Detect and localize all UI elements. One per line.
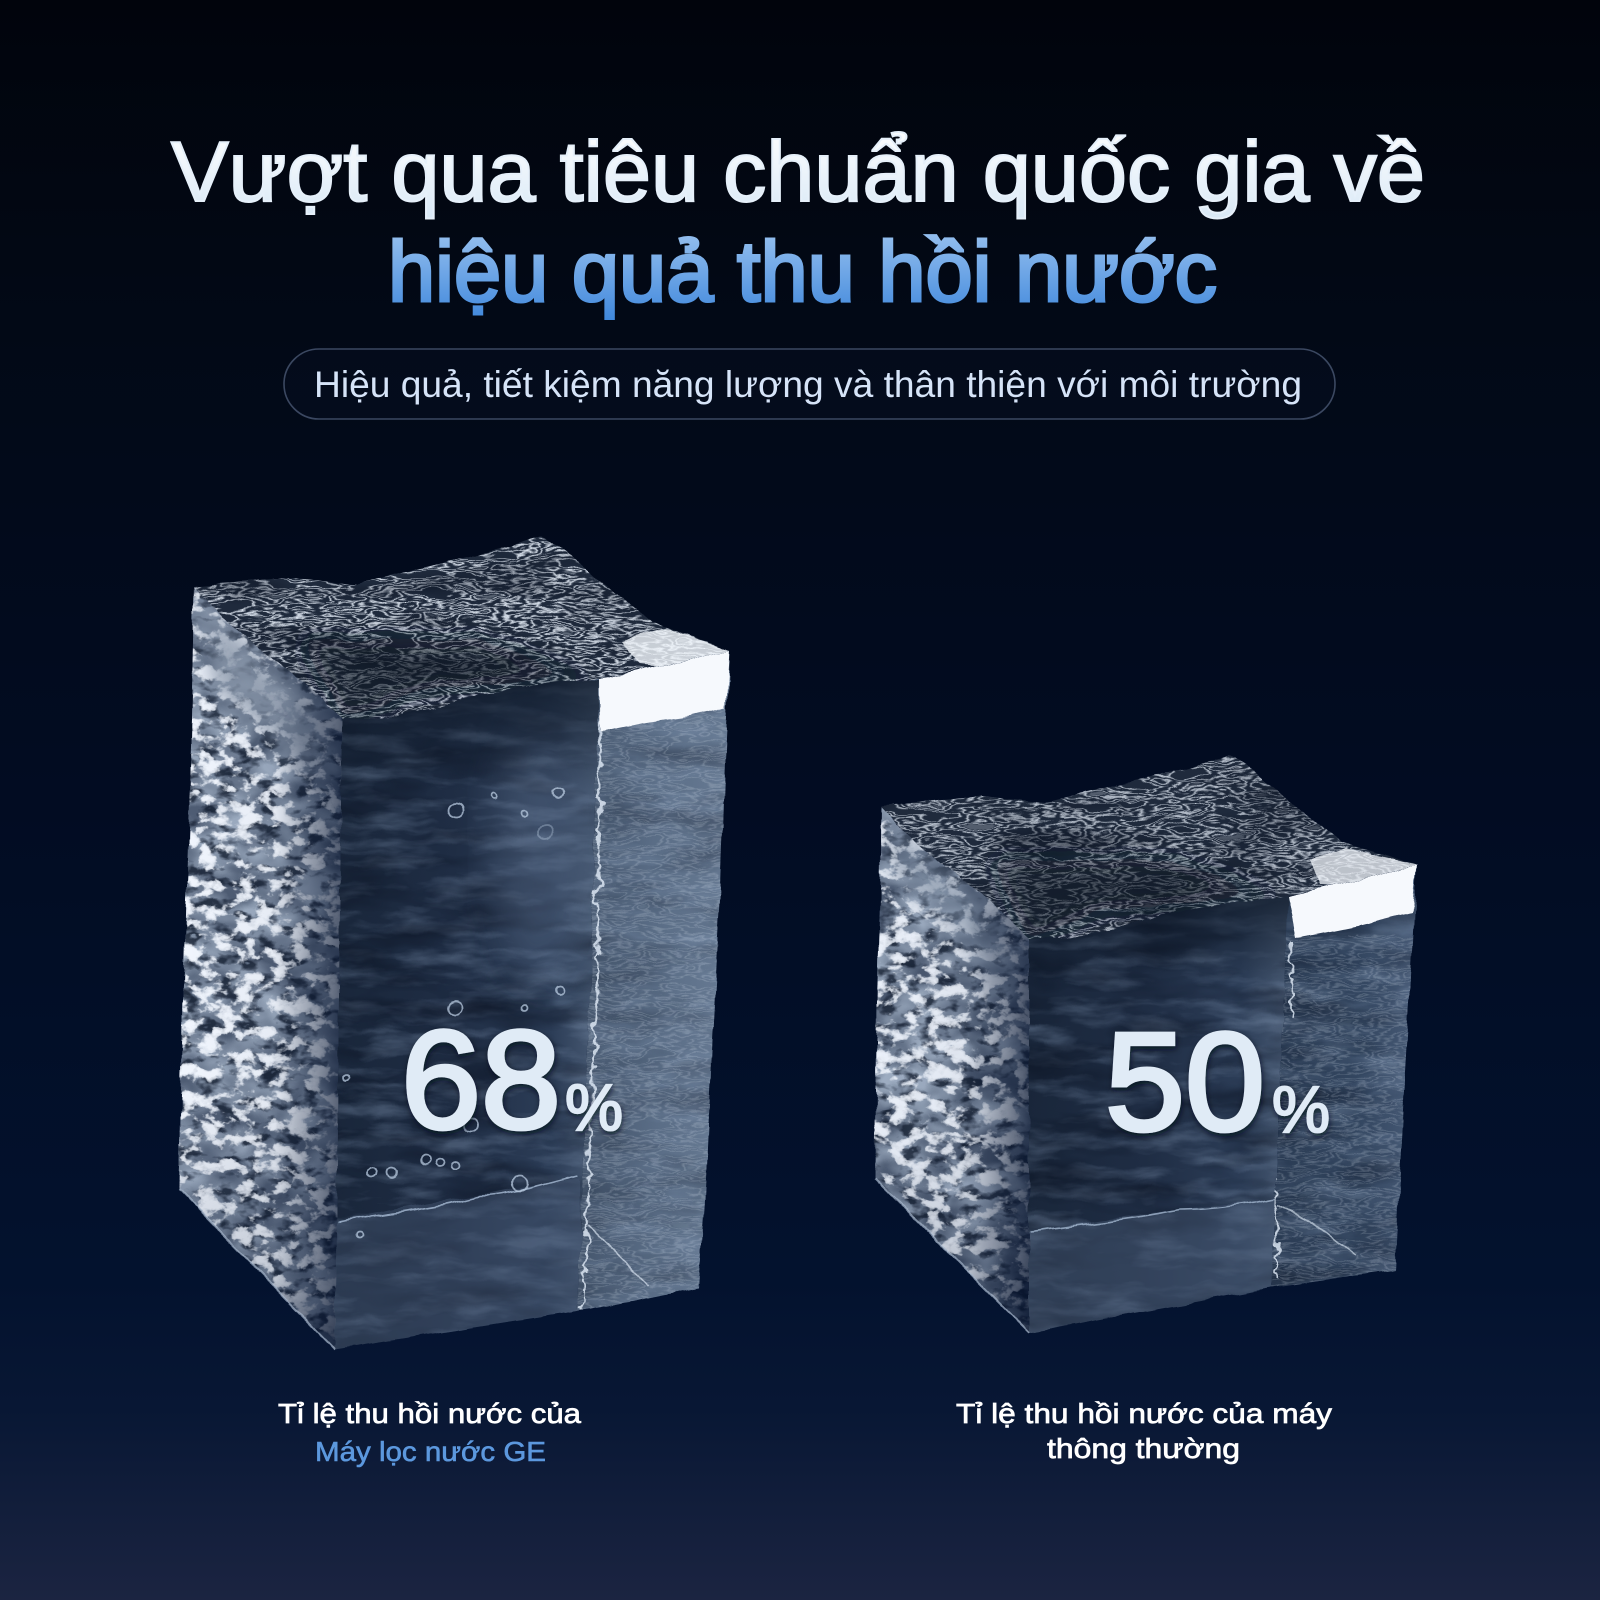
- title line 1: Vượt qua tiêu chuẩn quốc gia về: [171, 125, 1425, 220]
- stat: 50%: 50: [1105, 1003, 1265, 1160]
- left face: [870, 800, 1035, 1340]
- right face: [1268, 860, 1423, 1290]
- stat: 50%: %: [1272, 1072, 1330, 1146]
- bottom left edge highlight: [179, 1189, 335, 1349]
- bottom left edge highlight: [875, 1179, 1029, 1332]
- stat: 50%: [1105, 1003, 1330, 1160]
- ice block: conventional purifier, 50%: [870, 750, 1423, 1340]
- caption: conventional purifier: Tỉ lệ thu hồi nước của máy: [956, 1398, 1332, 1429]
- right face: [575, 645, 735, 1320]
- top face: [190, 530, 735, 725]
- subtitle pill: [284, 349, 1335, 419]
- bubbles: [342, 788, 564, 1239]
- front face: [1025, 890, 1295, 1335]
- title: [171, 125, 1425, 320]
- caption: conventional purifier: [956, 1398, 1332, 1464]
- left face: [178, 587, 342, 1350]
- caption: GE purifier: Máy lọc nước GE: [315, 1436, 546, 1467]
- caption: GE purifier: Tỉ lệ thu hồi nước của: [278, 1398, 581, 1429]
- caption: GE purifier: [278, 1398, 581, 1467]
- top face: [877, 750, 1422, 945]
- ice block: GE purifier, 68%: [170, 530, 735, 1360]
- stat: 68%: 68: [401, 1001, 561, 1158]
- subtitle pill: Hiệu quả, tiết kiệm năng lượng và thân thiện với môi trường: [314, 364, 1302, 405]
- caption: conventional purifier: thông thường: [1047, 1433, 1240, 1464]
- front face: [330, 675, 605, 1355]
- title line 2: hiệu quả thu hồi nước: [388, 225, 1217, 320]
- stat: 68%: %: [565, 1070, 623, 1144]
